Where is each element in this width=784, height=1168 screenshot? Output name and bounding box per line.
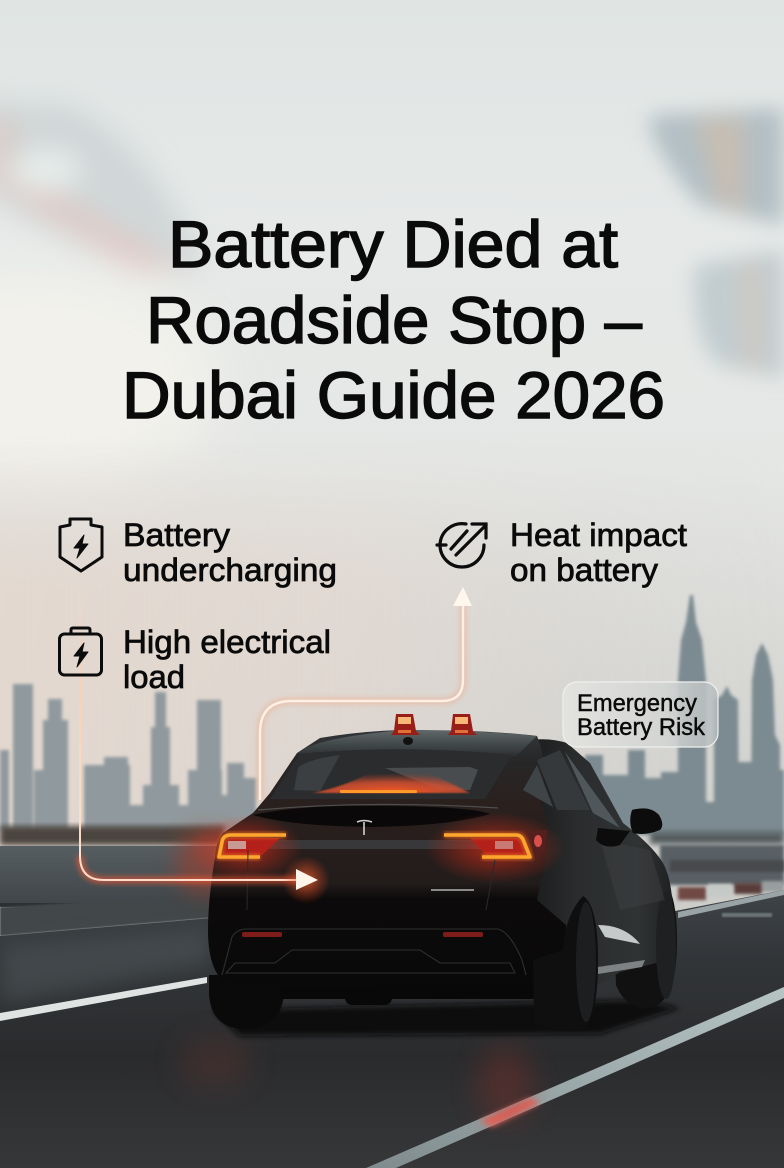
blurred reflection: top right bbox=[650, 108, 784, 378]
warning beacon: left bbox=[391, 714, 420, 745]
bumper reflectors bbox=[242, 932, 483, 937]
horizon treeline bbox=[0, 826, 784, 845]
rear body bbox=[208, 730, 566, 986]
trunk chrome bar bbox=[247, 840, 495, 849]
red reflection on lane bbox=[480, 1098, 540, 1127]
left lane line bbox=[0, 977, 207, 1021]
car shadow bbox=[212, 1000, 680, 1036]
background sky bbox=[0, 272, 784, 936]
wheel: rear left bbox=[209, 975, 284, 1029]
blurred reflection: top left bbox=[0, 100, 201, 272]
rear window bbox=[270, 749, 512, 799]
tail light: right bbox=[425, 812, 565, 884]
skyline: left bbox=[0, 684, 256, 830]
warning beacon: right bbox=[448, 714, 477, 735]
title bbox=[122, 207, 665, 432]
icon: heat impact bbox=[437, 524, 486, 567]
tail light: left bbox=[187, 814, 303, 882]
car body side bbox=[500, 739, 673, 990]
window reflection bbox=[294, 755, 340, 791]
car bbox=[187, 730, 677, 1031]
arrowhead up bbox=[453, 587, 472, 606]
far lane line bbox=[678, 890, 784, 918]
glowing path: right arrow from roof to heat impact bbox=[260, 587, 472, 800]
right lane line bbox=[366, 987, 784, 1168]
icon: battery shield bbox=[60, 519, 102, 571]
underbody bbox=[280, 980, 540, 1005]
callout: emergency battery risk: Emergency bbox=[577, 690, 697, 717]
icon: battery case bbox=[60, 628, 102, 675]
callout: emergency battery risk: Battery Risk bbox=[577, 714, 706, 741]
skyline: right bbox=[585, 595, 784, 835]
window heat glow bbox=[312, 768, 470, 793]
roadside barrier bbox=[0, 828, 784, 936]
side skirt bbox=[598, 960, 645, 974]
side windows bbox=[523, 765, 553, 807]
title: Dubai Guide 2026 bbox=[122, 358, 665, 432]
label: high electrical load: load bbox=[123, 659, 185, 695]
wheel: rear right bbox=[533, 896, 598, 1031]
label: high electrical load bbox=[123, 624, 331, 695]
roof highlight bbox=[297, 730, 537, 757]
title: Roadside Stop – bbox=[146, 283, 642, 357]
arrowhead into tail bbox=[282, 856, 330, 904]
wheel: front right bbox=[615, 880, 677, 1008]
shoulder highlight bbox=[258, 804, 498, 810]
road surface bbox=[0, 890, 784, 1168]
side reflection bbox=[600, 840, 665, 910]
label: battery undercharging: undercharging bbox=[123, 552, 337, 588]
lower bumper bbox=[222, 929, 526, 975]
label: heat impact on battery: Heat impact bbox=[510, 517, 687, 553]
glowing path: left arrow to tail bbox=[80, 590, 300, 880]
tesla logo bbox=[357, 820, 372, 835]
front wheel rim bbox=[656, 891, 676, 999]
spoiler shadow bbox=[253, 806, 490, 827]
label: heat impact on battery: on battery bbox=[510, 552, 658, 588]
title: Battery Died at bbox=[168, 207, 618, 281]
wing mirror bbox=[630, 808, 662, 834]
label: battery undercharging: Battery bbox=[123, 517, 230, 553]
label: heat impact on battery bbox=[510, 517, 687, 588]
callout: emergency battery risk bbox=[563, 682, 718, 747]
label: high electrical load: High electrical bbox=[123, 624, 331, 660]
label: battery undercharging bbox=[123, 517, 337, 588]
trunk line and badge bbox=[247, 850, 495, 910]
